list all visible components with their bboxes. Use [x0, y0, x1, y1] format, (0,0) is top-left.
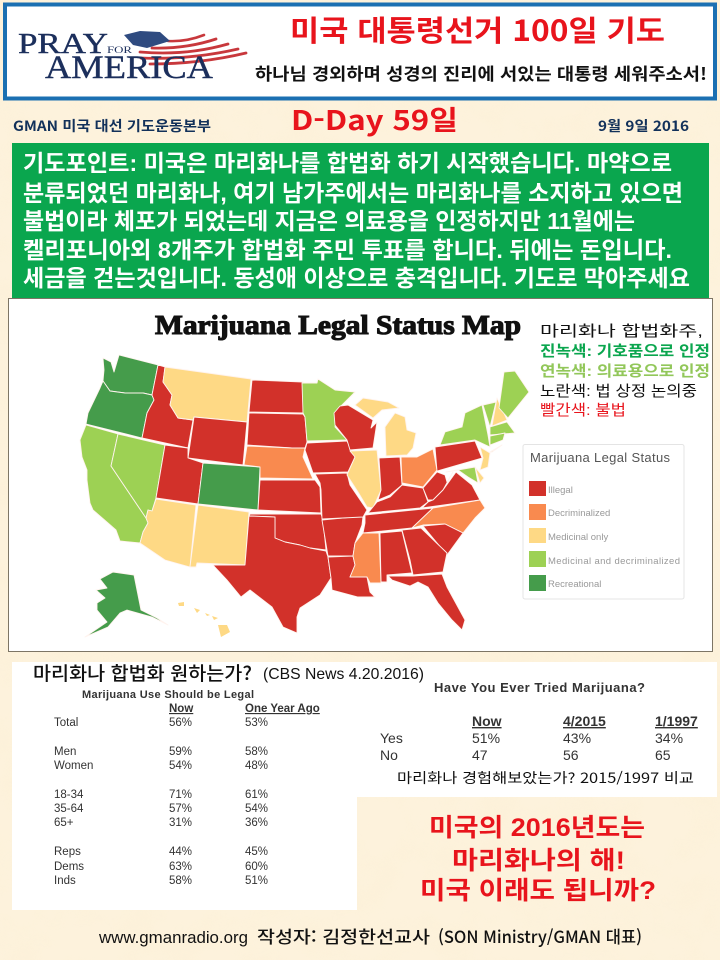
callout: year of marijuana: 미국의 2016년도는 [429, 814, 645, 842]
wordmark: AMERICA: AMERICA [45, 50, 213, 86]
table: tried marijuana: 34% [655, 730, 683, 746]
table: legal use by group: Inds [54, 875, 76, 887]
footer credit [98, 923, 642, 948]
table: legal use by group: Men [54, 746, 76, 758]
table: tried marijuana [380, 713, 698, 763]
legend: Recreational [548, 579, 601, 590]
callout: colour key in Korean: 진녹색: 기호품으로 인정 [540, 343, 710, 360]
table: tried marijuana: No [380, 747, 398, 763]
table: legal use by group: 36% [245, 817, 268, 829]
table caption: 마리화나 경험해보았는가? 2015/1997 비교 [397, 768, 694, 788]
banner title: 미국 대통령선거 100일 기도 [290, 8, 665, 50]
organisation label: GMAN 미국 대선 기도운동본부 [13, 116, 211, 136]
logo: Pray for America [18, 28, 246, 86]
table: tried marijuana: 4/2015 [563, 713, 606, 729]
prayer text line 4: 켈리포니아외 8개주가 합법화 주민 투표를 합니다. 뒤에는 돈입니다. [23, 237, 672, 263]
callout: year of marijuana: 마리화나의 해! [452, 847, 625, 875]
table: legal use by group: 53% [245, 717, 268, 729]
map title: Marijuana Legal Status Map [155, 310, 521, 340]
legend: Medicinal only [548, 532, 608, 543]
table: legal use by group: 60% [245, 861, 268, 873]
banner subtitle: 하나님 경외하며 성경의 진리에 서있는 대통령 세워주소서! [255, 60, 707, 85]
table: legal use by group: Total [54, 717, 78, 729]
table: legal use by group: 44% [169, 846, 192, 858]
table: legal use by group: 35-64 [54, 803, 84, 815]
table: legal use by group: One Year Ago [245, 703, 320, 715]
D-Day counter: D-Day 59일 [291, 99, 458, 138]
icon: waving American flag [124, 31, 246, 64]
table: legal use by group: 51% [245, 875, 268, 887]
table: legal use by group: 65+ [54, 817, 74, 829]
table: legal use by group: 31% [169, 817, 192, 829]
table: legal use by group [54, 703, 320, 887]
prayer text line 1: 기도포인트: 미국은 마리화나를 합법화 하기 시작했습니다. 마약으로 [23, 150, 672, 176]
callout: colour key in Korean: 노란색: 법 상정 논의중 [540, 383, 697, 400]
date: 9월 9일 2016 [598, 116, 689, 136]
legend: Medicinal and decriminalized [548, 556, 680, 567]
table: legal use by group: 45% [245, 846, 268, 858]
table title: Have You Ever Tried Marijuana? [434, 680, 645, 695]
footer credit: (SON Ministry/GMAN 대표) [438, 923, 642, 948]
panel: legalisation poll [12, 659, 357, 910]
prayer text line 3: 불법이라 체포가 되었는데 지금은 의료용을 인정하지만 11월에는 [23, 208, 635, 234]
panel: prayer point [12, 143, 709, 298]
callout: colour key in Korean: 마리화나 합법화주, [540, 323, 703, 340]
panel: tried marijuana poll [357, 662, 717, 797]
callout: year of marijuana: 미국 이래도 됩니까? [420, 877, 656, 905]
table: tried marijuana: 51% [472, 730, 500, 746]
panel: map [8, 298, 712, 652]
table: legal use by group: 59% [169, 746, 192, 758]
callout: colour key in Korean [540, 323, 710, 419]
table: legal use by group: 57% [169, 803, 192, 815]
table: tried marijuana: 47 [472, 747, 488, 763]
prayer text line 5: 세금을 걷는것입니다. 동성애 이상으로 충격입니다. 기도로 막아주세요 [23, 265, 690, 291]
chart: US state map [80, 355, 529, 637]
poll source: (CBS News 4.20.2016) [263, 666, 424, 683]
table: tried marijuana: 1/1997 [655, 713, 698, 729]
footer credit: www.gmanradio.org [98, 928, 248, 947]
table: tried marijuana: 43% [563, 730, 591, 746]
table: tried marijuana: 56 [563, 747, 579, 763]
wordmark: FOR: FOR [107, 45, 132, 55]
legend: Marijuana Legal Status [530, 450, 670, 465]
table: tried marijuana: Yes [380, 730, 403, 746]
table: legal use by group: Now [169, 703, 193, 715]
poll heading: 마리화나 합법화 원하는가? [33, 659, 252, 686]
table: tried marijuana: Now [472, 713, 502, 729]
table: legal use by group: 58% [169, 875, 192, 887]
table title: Marijuana Use Should be Legal [82, 689, 254, 701]
table: legal use by group: 54% [169, 760, 192, 772]
table: legal use by group: 54% [245, 803, 268, 815]
table: legal use by group: 63% [169, 861, 192, 873]
legend [523, 444, 684, 599]
callout: year of marijuana [420, 814, 656, 905]
legend: Illegal [548, 485, 573, 496]
legend: Decriminalized [548, 508, 610, 519]
table: legal use by group: 48% [245, 760, 268, 772]
table: legal use by group: 61% [245, 789, 268, 801]
wordmark: PRAY: PRAY [18, 28, 108, 60]
table: legal use by group: 71% [169, 789, 192, 801]
table: legal use by group: 58% [245, 746, 268, 758]
table: legal use by group: Women [54, 760, 93, 772]
callout: colour key in Korean: 빨간색: 불법 [540, 402, 626, 419]
header banner [5, 4, 715, 98]
table: legal use by group: Reps [54, 846, 81, 858]
table: legal use by group: 56% [169, 717, 192, 729]
table: legal use by group: 18-34 [54, 789, 84, 801]
table: legal use by group: Dems [54, 861, 84, 873]
table: tried marijuana: 65 [655, 747, 671, 763]
footer credit: 작성자: 김정한선교사 [257, 923, 430, 948]
prayer text line 2: 분류되었던 마리화나, 여기 남가주에서는 마리화나를 소지하고 있으면 [23, 180, 683, 206]
callout: colour key in Korean: 연녹색: 의료용으로 인정 [540, 363, 710, 380]
